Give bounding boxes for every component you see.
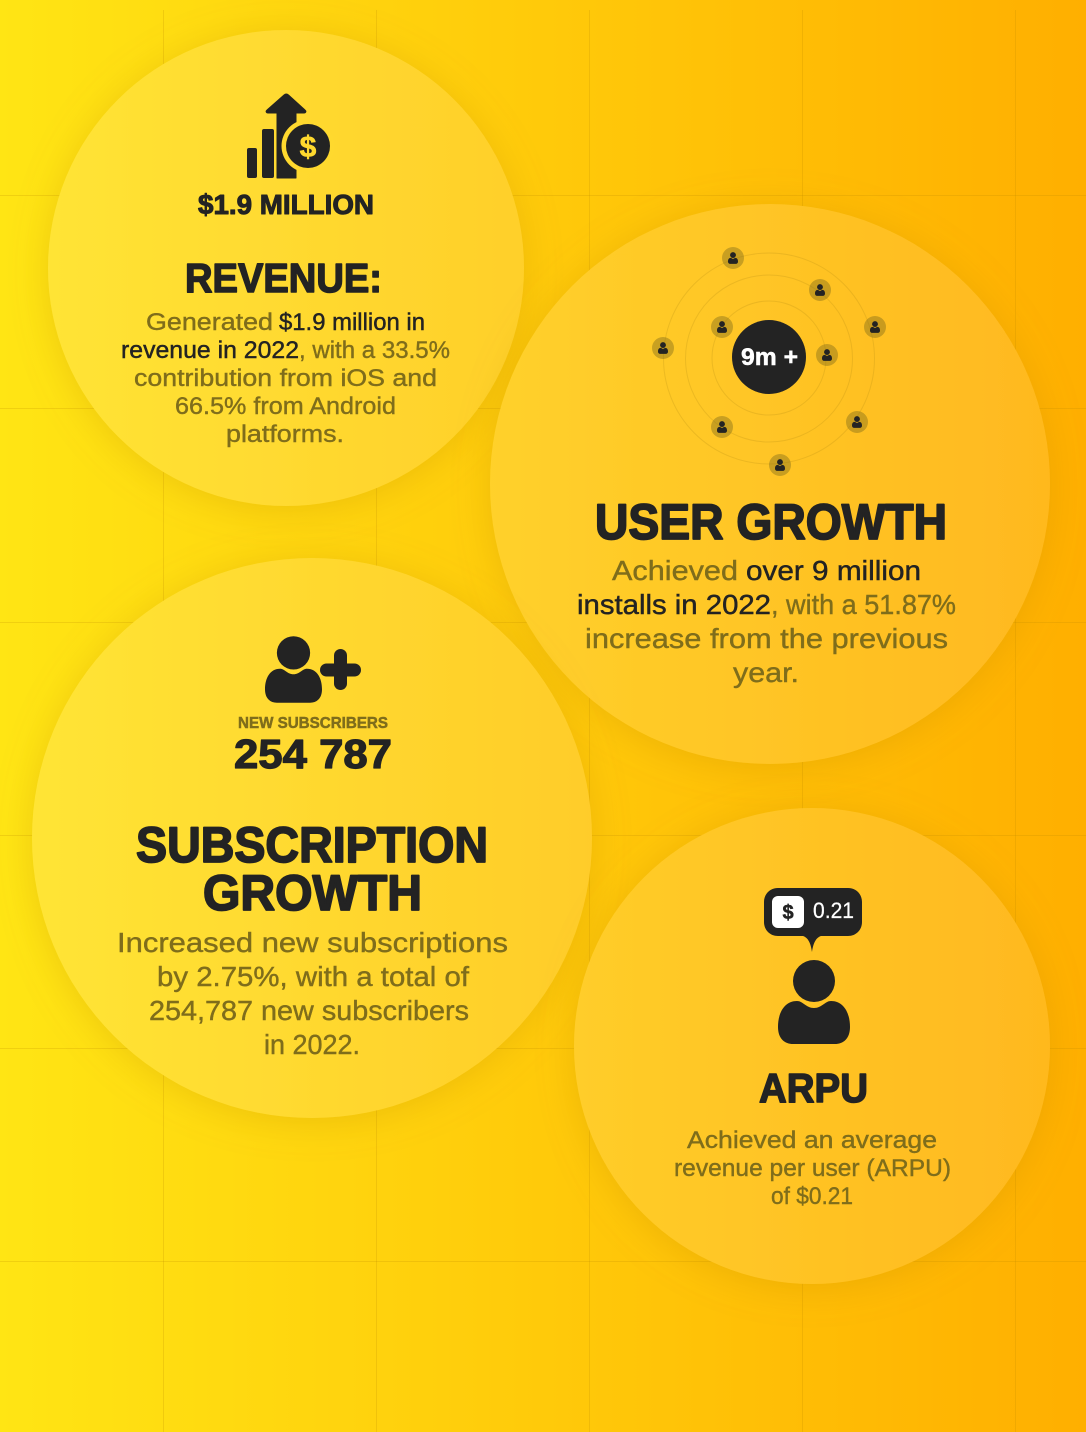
revenue description: 66.5% from Android [175, 393, 396, 420]
panel: subscription growth [32, 558, 592, 1118]
user growth description: installs in 2022 [577, 589, 771, 620]
orbit diagram: 9m+ users: 9m + [741, 344, 798, 371]
subscription growth description: Increased new subscriptions [117, 927, 508, 958]
subscription growth heading: SUBSCRIPTION [136, 817, 488, 873]
ARPU description: of $0.21 [771, 1183, 853, 1210]
revenue description: platforms. [226, 421, 344, 448]
icon: revenue chart with arrow and dollar coin [247, 94, 334, 178]
panel: user growth [490, 204, 1050, 764]
ARPU description [674, 1127, 951, 1210]
subscription growth description: in 2022. [264, 1029, 360, 1060]
revenue amount: $1.9 MILLION [198, 189, 374, 220]
user growth description: , with a 51.87% [771, 589, 956, 620]
subscription growth description [117, 927, 508, 1060]
icon: user with price bubble: 0.21 [813, 898, 854, 923]
user growth description: year. [733, 657, 799, 688]
revenue description: Generated [146, 309, 273, 336]
ARPU description: Achieved an average [687, 1127, 937, 1154]
revenue heading: REVENUE: [185, 255, 382, 301]
ARPU heading: ARPU [759, 1065, 868, 1111]
new subscribers count: 254 787 [234, 731, 392, 777]
icon: add subscriber [265, 636, 361, 703]
revenue description: $1.9 million in [279, 309, 425, 336]
panel: ARPU [574, 808, 1050, 1284]
user growth description: over 9 million [746, 555, 921, 586]
user growth description: increase from the previous [585, 623, 948, 654]
user growth description: Achieved [612, 555, 738, 586]
subscription growth heading: GROWTH [203, 865, 422, 921]
orbit diagram: 9m+ users [652, 247, 886, 476]
revenue description: , with a 33.5% [299, 337, 450, 364]
revenue description [121, 309, 450, 448]
subscription growth heading [136, 817, 488, 921]
ARPU description: revenue per user (ARPU) [674, 1155, 951, 1182]
panel: revenue [48, 30, 524, 506]
user growth heading: USER GROWTH [595, 494, 947, 550]
icon: user with price bubble: $ [782, 902, 794, 924]
icon: user with price bubble [764, 888, 862, 1044]
revenue description: revenue in 2022 [121, 337, 299, 364]
revenue description: contribution from iOS and [134, 365, 437, 392]
subscription growth description: by 2.75%, with a total of [157, 961, 469, 992]
new subscribers label: NEW SUBSCRIBERS [238, 715, 388, 732]
subscription growth description: 254,787 new subscribers [149, 995, 469, 1026]
icon: revenue chart with arrow and dollar coin: $ [300, 131, 317, 164]
user growth description [577, 555, 956, 688]
